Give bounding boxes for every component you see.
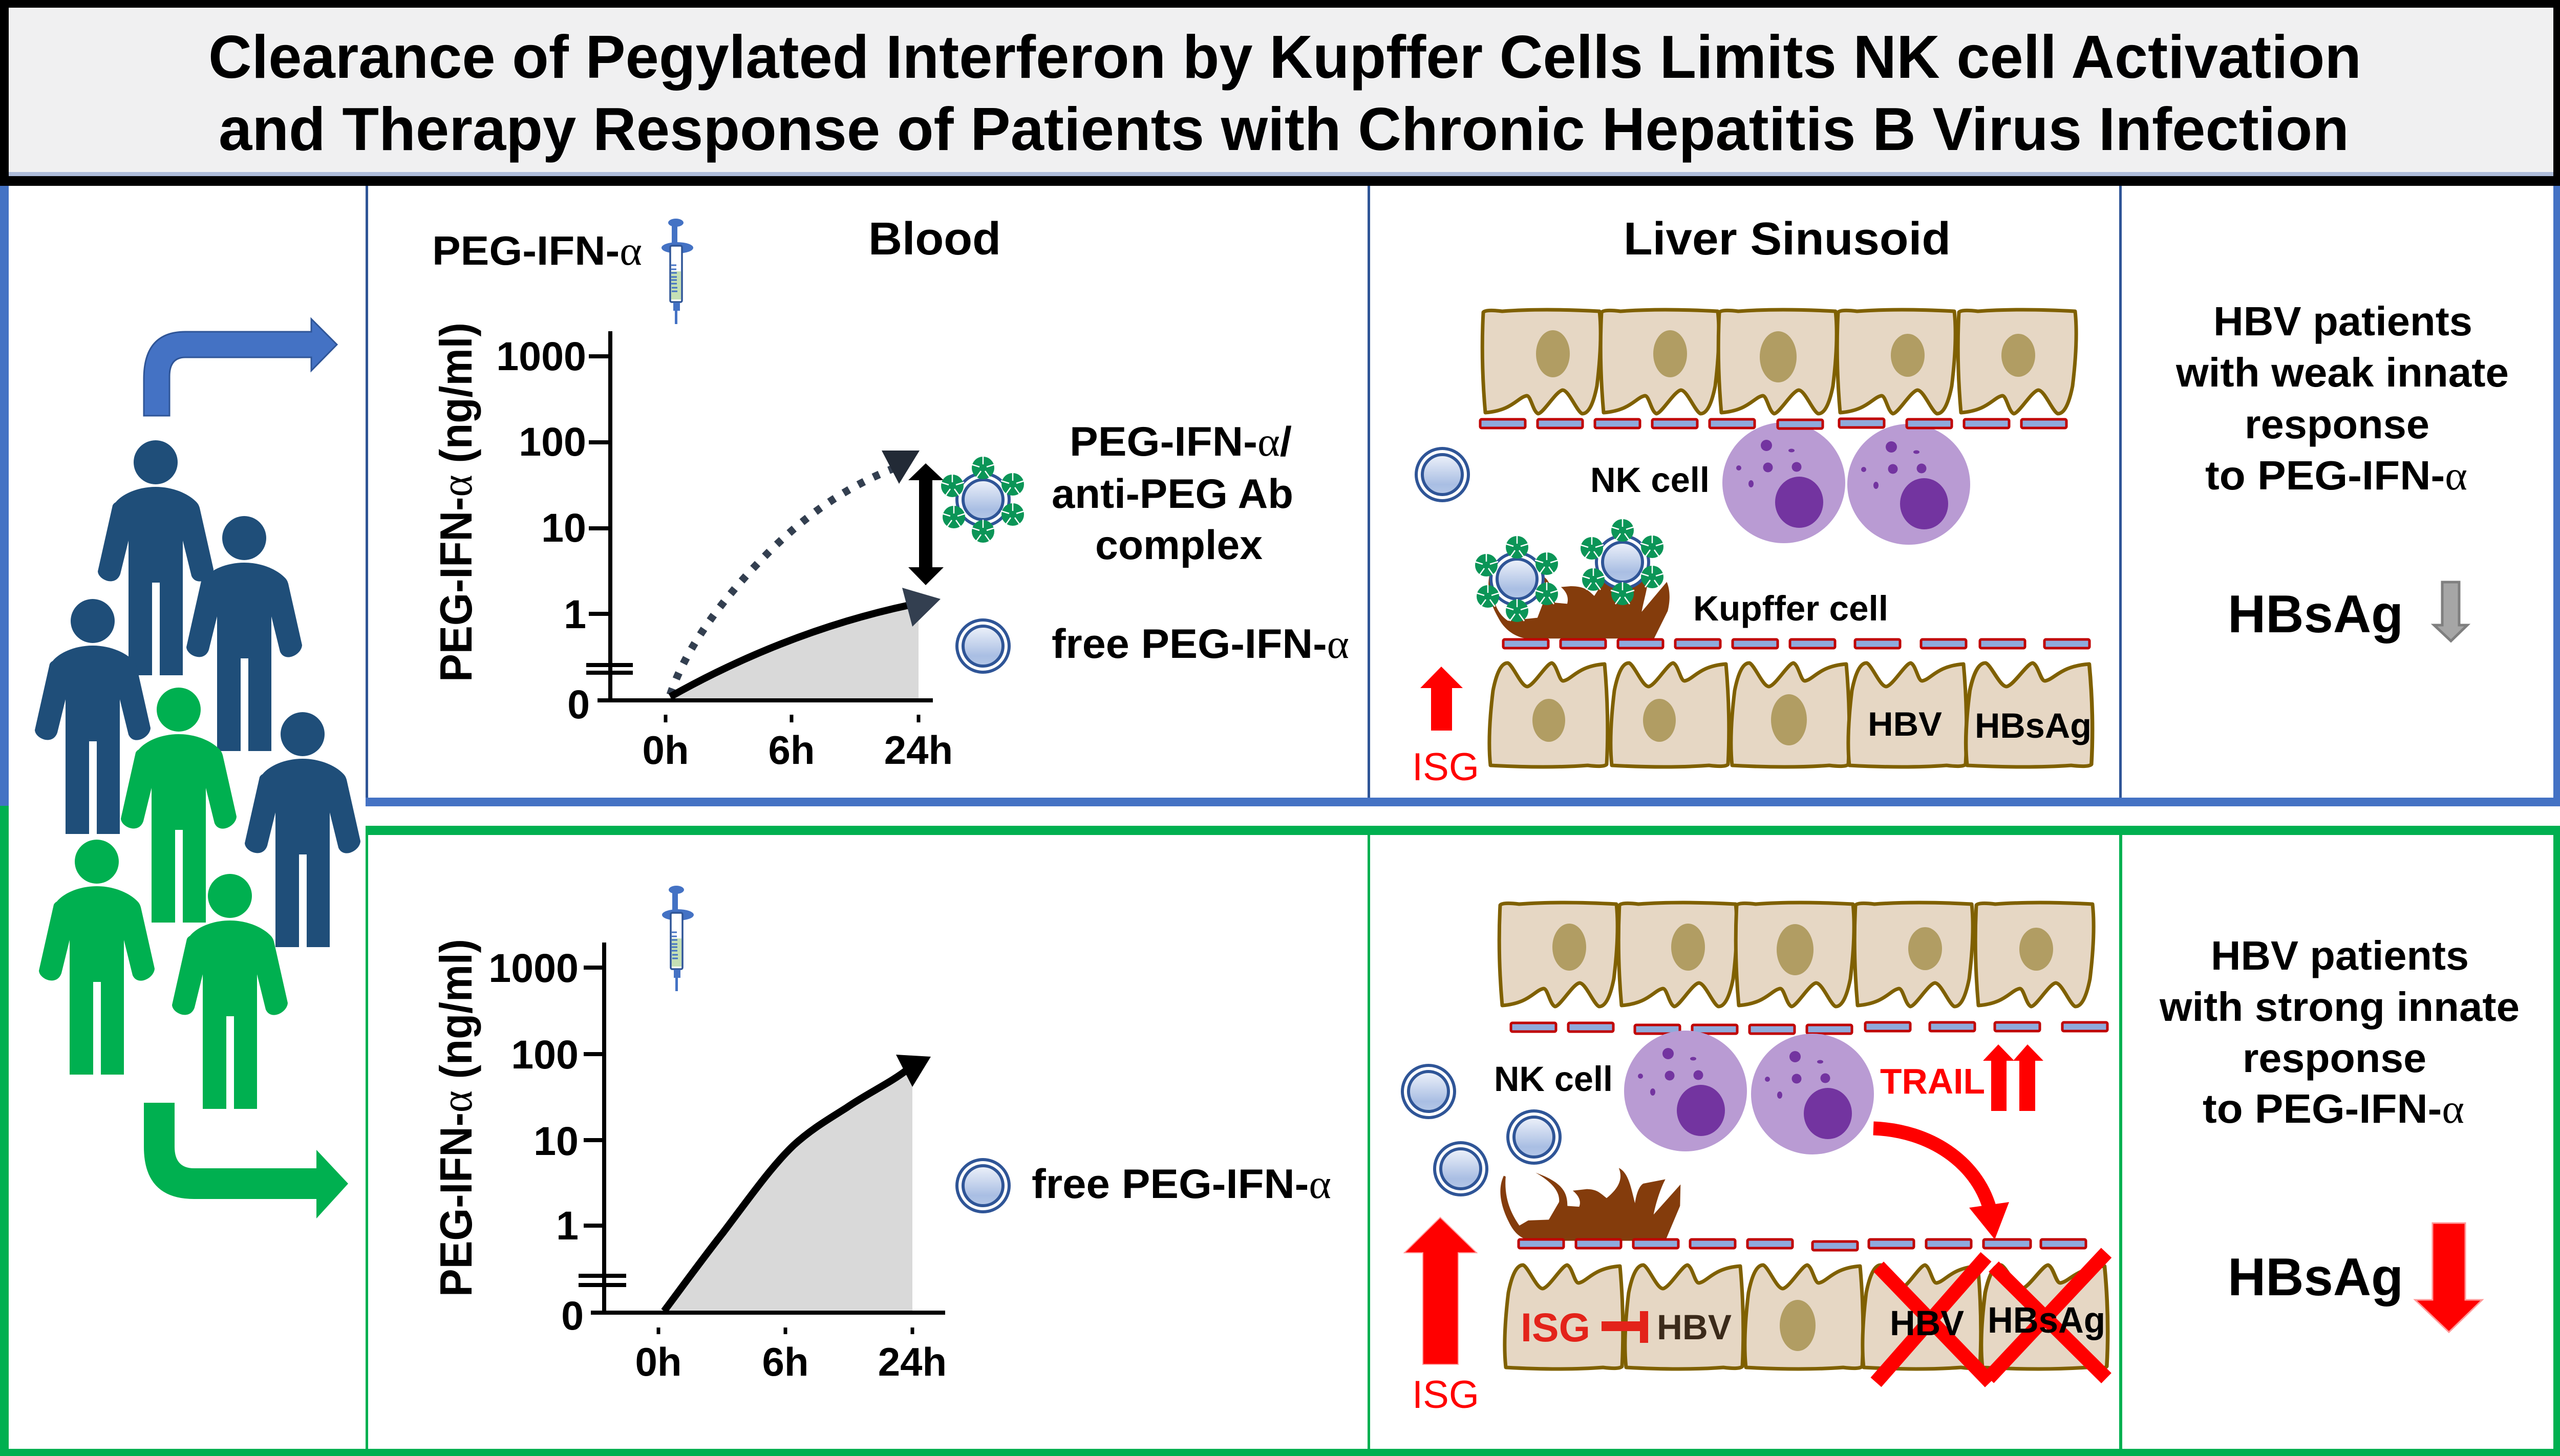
lower hepatocytes — [1505, 1265, 2108, 1369]
conclusion: weak innate response: response — [2245, 401, 2429, 447]
label: ISG: ISG — [1412, 745, 1479, 789]
label: ISG inhibits HBV — [1521, 1304, 1732, 1350]
label: complex — [1052, 419, 1293, 568]
heading: Liver Sinusoid: Liver Sinusoid — [1624, 213, 1951, 265]
icon: PEG-IFN/anti-PEG complex — [941, 456, 1025, 543]
NK cells — [1722, 422, 1970, 545]
conclusion: strong innate response — [2159, 933, 2520, 1332]
sinusoid strong response — [1402, 903, 2108, 1417]
Kupffer cell — [1500, 1168, 1680, 1241]
title banner — [0, 0, 2560, 186]
label: ISG: ISG — [1412, 1373, 1479, 1417]
label: ISG inhibits HBV: ISG — [1521, 1304, 1590, 1350]
heading: Blood: Blood — [868, 213, 1001, 265]
icon: syringe top — [662, 219, 693, 324]
chart: blood PEG-IFN weak response: 0h — [642, 727, 689, 773]
conclusion: strong innate response: HBsAg — [2228, 1248, 2403, 1307]
complexes on Kupffer cell — [1475, 519, 1664, 622]
chart: blood PEG-IFN strong response: 1 — [556, 1203, 579, 1248]
red crosses — [1876, 1253, 2106, 1382]
double arrow: concentration difference — [908, 463, 944, 585]
label: NK cell: NK cell — [1590, 460, 1710, 500]
chart: blood PEG-IFN weak response: 24h — [884, 727, 953, 773]
arrow: patients to weak response — [144, 319, 337, 416]
icon: syringe bottom — [662, 886, 694, 991]
Kupffer cell — [1488, 574, 1670, 638]
icon: free PEG-IFN — [957, 620, 1009, 672]
label: free PEG-IFN bottom: free PEG-IFN-α — [1032, 1161, 1331, 1207]
icon: free PEG-IFN bottom — [957, 1160, 1009, 1212]
chart: blood PEG-IFN strong response: PEG-IFN-α (ng/ml) — [431, 939, 482, 1297]
label: free PEG-IFN: free PEG-IFN-α — [1052, 621, 1349, 667]
chart: blood PEG-IFN strong response: 1000 — [488, 945, 579, 991]
label: NK cell: NK cell — [1494, 1059, 1613, 1099]
label: TRAIL: TRAIL — [1880, 1061, 1985, 1101]
label: complex: anti-PEG Ab — [1052, 471, 1293, 517]
chart: blood PEG-IFN weak response: 6h — [768, 727, 815, 773]
lower endothelium — [1503, 639, 2089, 648]
chart: blood PEG-IFN strong response — [431, 939, 947, 1384]
upper endothelium — [1511, 1022, 2107, 1034]
patient group figures — [35, 440, 360, 1109]
NK cells — [1624, 1031, 1874, 1154]
free PEG-IFN particle — [1416, 448, 1468, 501]
label: PEG-IFN-alpha: PEG-IFN-α — [432, 228, 642, 274]
conclusion: weak innate response: HBV patients — [2213, 298, 2472, 344]
label: complex: PEG-IFN-α/ — [1070, 419, 1292, 465]
chart: blood PEG-IFN weak response: 100 — [519, 419, 586, 464]
arrow: patients to strong response — [144, 1103, 348, 1218]
lower hepatocytes: HBV — [1868, 705, 1942, 743]
conclusion: weak innate response: HBsAg — [2228, 585, 2403, 644]
chart: blood PEG-IFN strong response: 0 — [561, 1293, 584, 1338]
chart: blood PEG-IFN strong response: 24h — [878, 1339, 947, 1384]
chart: blood PEG-IFN strong response: 10 — [534, 1118, 579, 1164]
label: complex: complex — [1095, 522, 1263, 568]
chart: blood PEG-IFN weak response: 1 — [564, 591, 586, 637]
chart: blood PEG-IFN strong response: 6h — [762, 1339, 809, 1384]
free PEG-IFN particles — [1402, 1065, 1560, 1195]
chart: blood PEG-IFN strong response: 0h — [635, 1339, 682, 1384]
lower hepatocytes — [1489, 663, 2093, 767]
conclusion: strong innate response: response — [2243, 1035, 2426, 1081]
lower hepatocytes: HBsAg — [1975, 706, 2092, 745]
conclusion: strong innate response: HBV patients — [2211, 933, 2469, 978]
conclusion: strong innate response: to PEG-IFN-α — [2203, 1086, 2464, 1132]
green strong-responder frame — [0, 806, 2560, 1456]
label: Kupffer cell: Kupffer cell — [1693, 589, 1888, 628]
chart: blood PEG-IFN weak response: 0 — [567, 681, 590, 727]
chart: blood PEG-IFN strong response: 100 — [511, 1032, 579, 1077]
chart: blood PEG-IFN weak response — [431, 323, 953, 773]
upper hepatocytes — [1499, 903, 2094, 1007]
title banner: and Therapy Response of Patients with Chronic Hepatitis B Virus Infection — [219, 95, 2349, 163]
upper hepatocytes — [1482, 310, 2076, 414]
chart: blood PEG-IFN weak response: 1000 — [496, 333, 586, 379]
upper endothelium — [1480, 419, 2066, 429]
chart: blood PEG-IFN weak response: PEG-IFN-α (ng/ml) — [431, 323, 482, 682]
arrow: large HBsAg decline — [2415, 1223, 2482, 1332]
label: HBV: HBV — [1890, 1303, 1964, 1343]
chart: blood PEG-IFN weak response: 10 — [541, 505, 586, 550]
label: HBsAg: HBsAg — [1988, 1300, 2105, 1341]
title banner: Clearance of Pegylated Interferon by Kupffer Cells Limits NK cell Activation — [208, 23, 2361, 91]
arrow: large ISG up — [1404, 1217, 1477, 1364]
conclusion: strong innate response: with strong innate — [2159, 984, 2520, 1030]
curved arrow: TRAIL kills infected cells — [1873, 1128, 2009, 1239]
label: ISG inhibits HBV: HBV — [1657, 1308, 1732, 1347]
conclusion: weak innate response: with weak innate — [2175, 350, 2509, 395]
blue weak-responder frame — [0, 186, 2560, 806]
arrows: TRAIL up — [1983, 1044, 2043, 1111]
sinusoid weak response — [1412, 310, 2093, 789]
arrow: small HBsAg decline — [2434, 582, 2467, 641]
lower endothelium — [1519, 1239, 2086, 1250]
conclusion: weak innate response: to PEG-IFN-α — [2205, 453, 2467, 499]
arrow: ISG up — [1420, 667, 1463, 731]
conclusion: weak innate response — [2175, 298, 2509, 644]
